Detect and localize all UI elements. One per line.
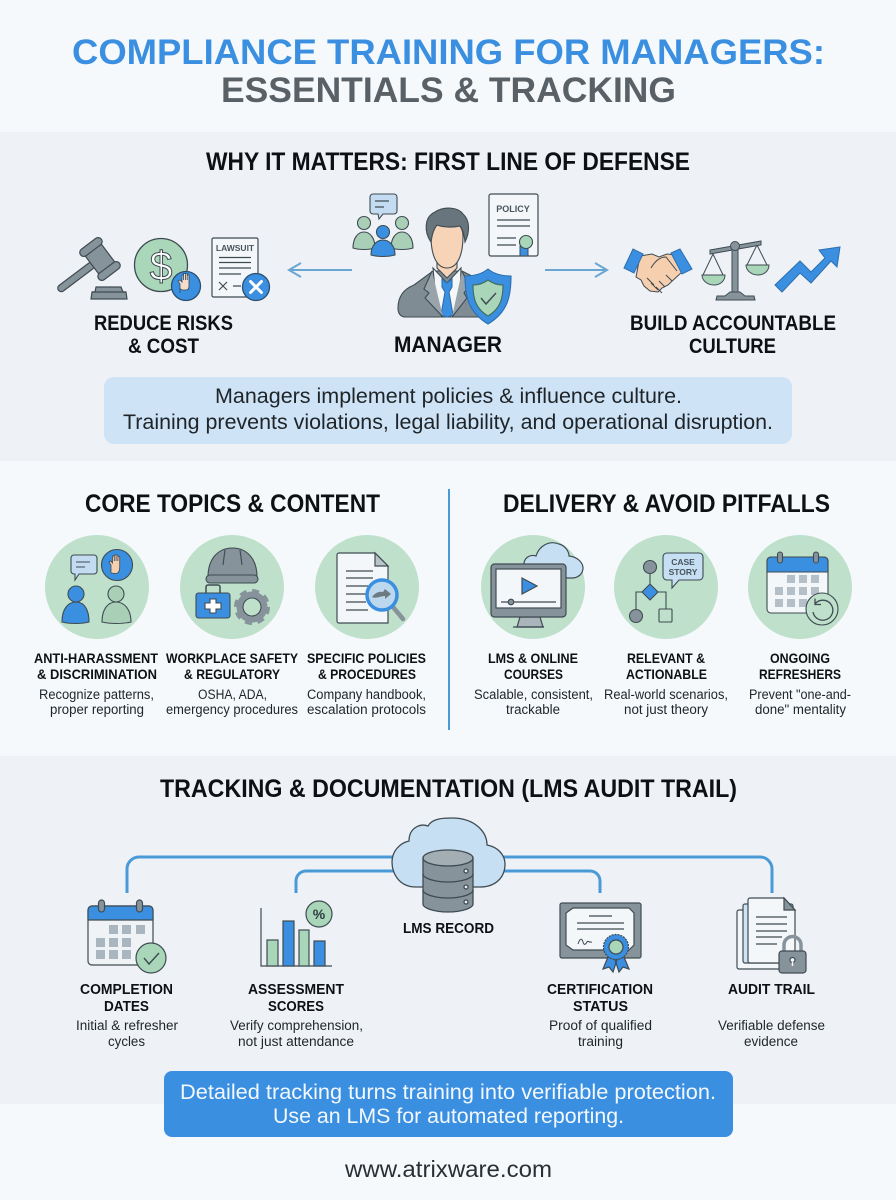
text: relevant and actionable <box>604 650 728 717</box>
text: build accountable culture: BUILD ACCOUNTABLE <box>630 312 836 335</box>
icon: rising arrow <box>775 247 840 292</box>
callout: why it matters summary: Training prevents violations, legal liability, and operational disruption. <box>123 411 773 434</box>
text: anti-harassment: proper reporting <box>50 702 144 717</box>
text: workplace safety <box>166 650 299 717</box>
chart icon: assessment scores <box>261 901 332 966</box>
heading: why it matters: WHY IT MATTERS: FIRST LINE OF DEFENSE <box>206 148 690 176</box>
text: certification status: CERTIFICATION <box>547 982 653 998</box>
text: relevant and actionable: RELEVANT & <box>627 650 705 666</box>
text: ongoing refreshers <box>749 650 851 717</box>
callout: tracking takeaway: Use an LMS for automated reporting. <box>273 1105 624 1128</box>
icon: policy document: POLICY <box>496 204 530 214</box>
text: policies: & PROCEDURES <box>318 666 416 682</box>
text: online courses: LMS & ONLINE <box>488 650 578 666</box>
icon: policy document <box>489 194 538 256</box>
text: policies <box>307 650 426 717</box>
icon: cloud database <box>392 818 505 912</box>
arrow: manager to reduce risks <box>289 263 352 277</box>
icon: anti-harassment <box>45 535 149 639</box>
chart icon: assessment scores: % <box>313 906 326 922</box>
text: anti-harassment <box>34 650 158 717</box>
callout: tracking takeaway <box>164 1071 733 1137</box>
text: anti-harassment: ANTI-HARASSMENT <box>34 650 158 666</box>
text: completion dates: Initial & refresher <box>76 1018 178 1033</box>
text: certification status: training <box>578 1034 623 1049</box>
text: relevant and actionable: not just theory <box>624 702 708 717</box>
footer url: www.atrixware.com <box>344 1156 552 1182</box>
text: assessment scores: Verify comprehension, <box>230 1018 363 1033</box>
text: policies: SPECIFIC POLICIES <box>307 650 426 666</box>
text: assessment scores: not just attendance <box>238 1034 354 1049</box>
text: ongoing refreshers: Prevent "one-and- <box>749 687 851 702</box>
icon: manager with shield <box>398 208 511 324</box>
icon: team with speech bubble <box>353 194 413 256</box>
text: policies: escalation protocols <box>307 702 426 717</box>
icon: handshake <box>624 249 692 293</box>
text: completion dates <box>76 982 178 1049</box>
text: audit trail <box>718 982 825 1049</box>
text: completion dates: COMPLETION <box>80 982 173 998</box>
callout: why it matters summary <box>104 377 792 444</box>
panel: core topics <box>34 490 426 717</box>
text: reduce risks: REDUCE RISKS <box>94 312 233 335</box>
text: ongoing refreshers: done" mentality <box>755 702 846 717</box>
text: certification status: STATUS <box>573 999 628 1015</box>
text: assessment scores: SCORES <box>268 999 324 1015</box>
text: lms record: LMS RECORD <box>403 921 494 937</box>
callout: tracking takeaway: Detailed tracking turns training into verifiable protection. <box>180 1081 716 1104</box>
icon: balance scale <box>702 241 769 300</box>
text: assessment scores: ASSESSMENT <box>248 982 344 998</box>
icon: certificate <box>560 903 641 972</box>
icon: case story flowchart <box>614 535 718 639</box>
text: build accountable culture: CULTURE <box>689 335 776 358</box>
icon: audit trail documents with lock <box>737 898 806 973</box>
text: online courses: Scalable, consistent, <box>474 687 593 702</box>
text: completion dates: DATES <box>104 999 149 1015</box>
text: anti-harassment: & DISCRIMINATION <box>37 666 157 682</box>
panel: delivery and pitfalls <box>474 490 852 717</box>
icon: calendar with check <box>88 900 166 973</box>
text: ongoing refreshers: ONGOING <box>770 650 830 666</box>
panel: why it matters <box>47 148 840 444</box>
text: workplace safety: emergency procedures <box>166 702 298 717</box>
icon: online course monitor <box>481 535 585 639</box>
text: manager: MANAGER <box>394 332 502 357</box>
text: audit trail: AUDIT TRAIL <box>728 982 815 998</box>
text: online courses: COURSES <box>504 666 563 682</box>
icon: case story flowchart: STORY <box>669 567 698 577</box>
text: certification status: Proof of qualified <box>549 1018 652 1033</box>
text: build accountable culture <box>630 312 836 358</box>
text: completion dates: cycles <box>108 1034 145 1049</box>
icon: workplace safety <box>180 535 284 639</box>
heading: tracking: TRACKING & DOCUMENTATION (LMS AUDIT TRAIL) <box>160 775 737 803</box>
icon: case story flowchart: CASE <box>671 557 695 567</box>
text: workplace safety: WORKPLACE SAFETY <box>166 650 299 666</box>
text: assessment scores <box>230 982 363 1049</box>
icon: dollar with stop hand <box>134 238 200 300</box>
text: certification status <box>547 982 653 1049</box>
heading: delivery and pitfalls: DELIVERY & AVOID PITFALLS <box>503 490 830 518</box>
text: reduce risks: & COST <box>128 335 199 358</box>
text: online courses: trackable <box>506 702 560 717</box>
text: anti-harassment: Recognize patterns, <box>39 687 154 702</box>
icon: dollar with stop hand: $ <box>150 243 173 289</box>
title: ESSENTIALS & TRACKING <box>221 71 676 110</box>
icon: calendar with refresh <box>748 535 852 639</box>
title: COMPLIANCE TRAINING FOR MANAGERS: <box>72 33 825 72</box>
title <box>72 33 825 110</box>
text: ongoing refreshers: REFRESHERS <box>759 666 841 682</box>
callout: why it matters summary: Managers implement policies & influence culture. <box>215 385 682 408</box>
connectors: lms to records <box>127 857 772 893</box>
text: audit trail: evidence <box>744 1034 798 1049</box>
text: online courses <box>474 650 593 717</box>
icon: lawsuit document: LAWSUIT <box>216 243 255 253</box>
text: audit trail: Verifiable defense <box>718 1018 825 1033</box>
icon: policies document <box>315 535 419 639</box>
text: workplace safety: OSHA, ADA, <box>198 687 267 702</box>
icon: lawsuit document <box>212 238 270 300</box>
icon: gavel <box>47 236 127 305</box>
text: policies: Company handbook, <box>307 687 426 702</box>
text: relevant and actionable: ACTIONABLE <box>626 666 707 682</box>
heading: core topics: CORE TOPICS & CONTENT <box>85 490 380 518</box>
text: relevant and actionable: Real-world scenarios, <box>604 687 728 702</box>
text: reduce risks <box>94 312 233 358</box>
text: workplace safety: & REGULATORY <box>184 666 281 682</box>
panel: tracking and documentation <box>76 775 825 1137</box>
arrow: manager to accountable culture <box>545 263 607 277</box>
